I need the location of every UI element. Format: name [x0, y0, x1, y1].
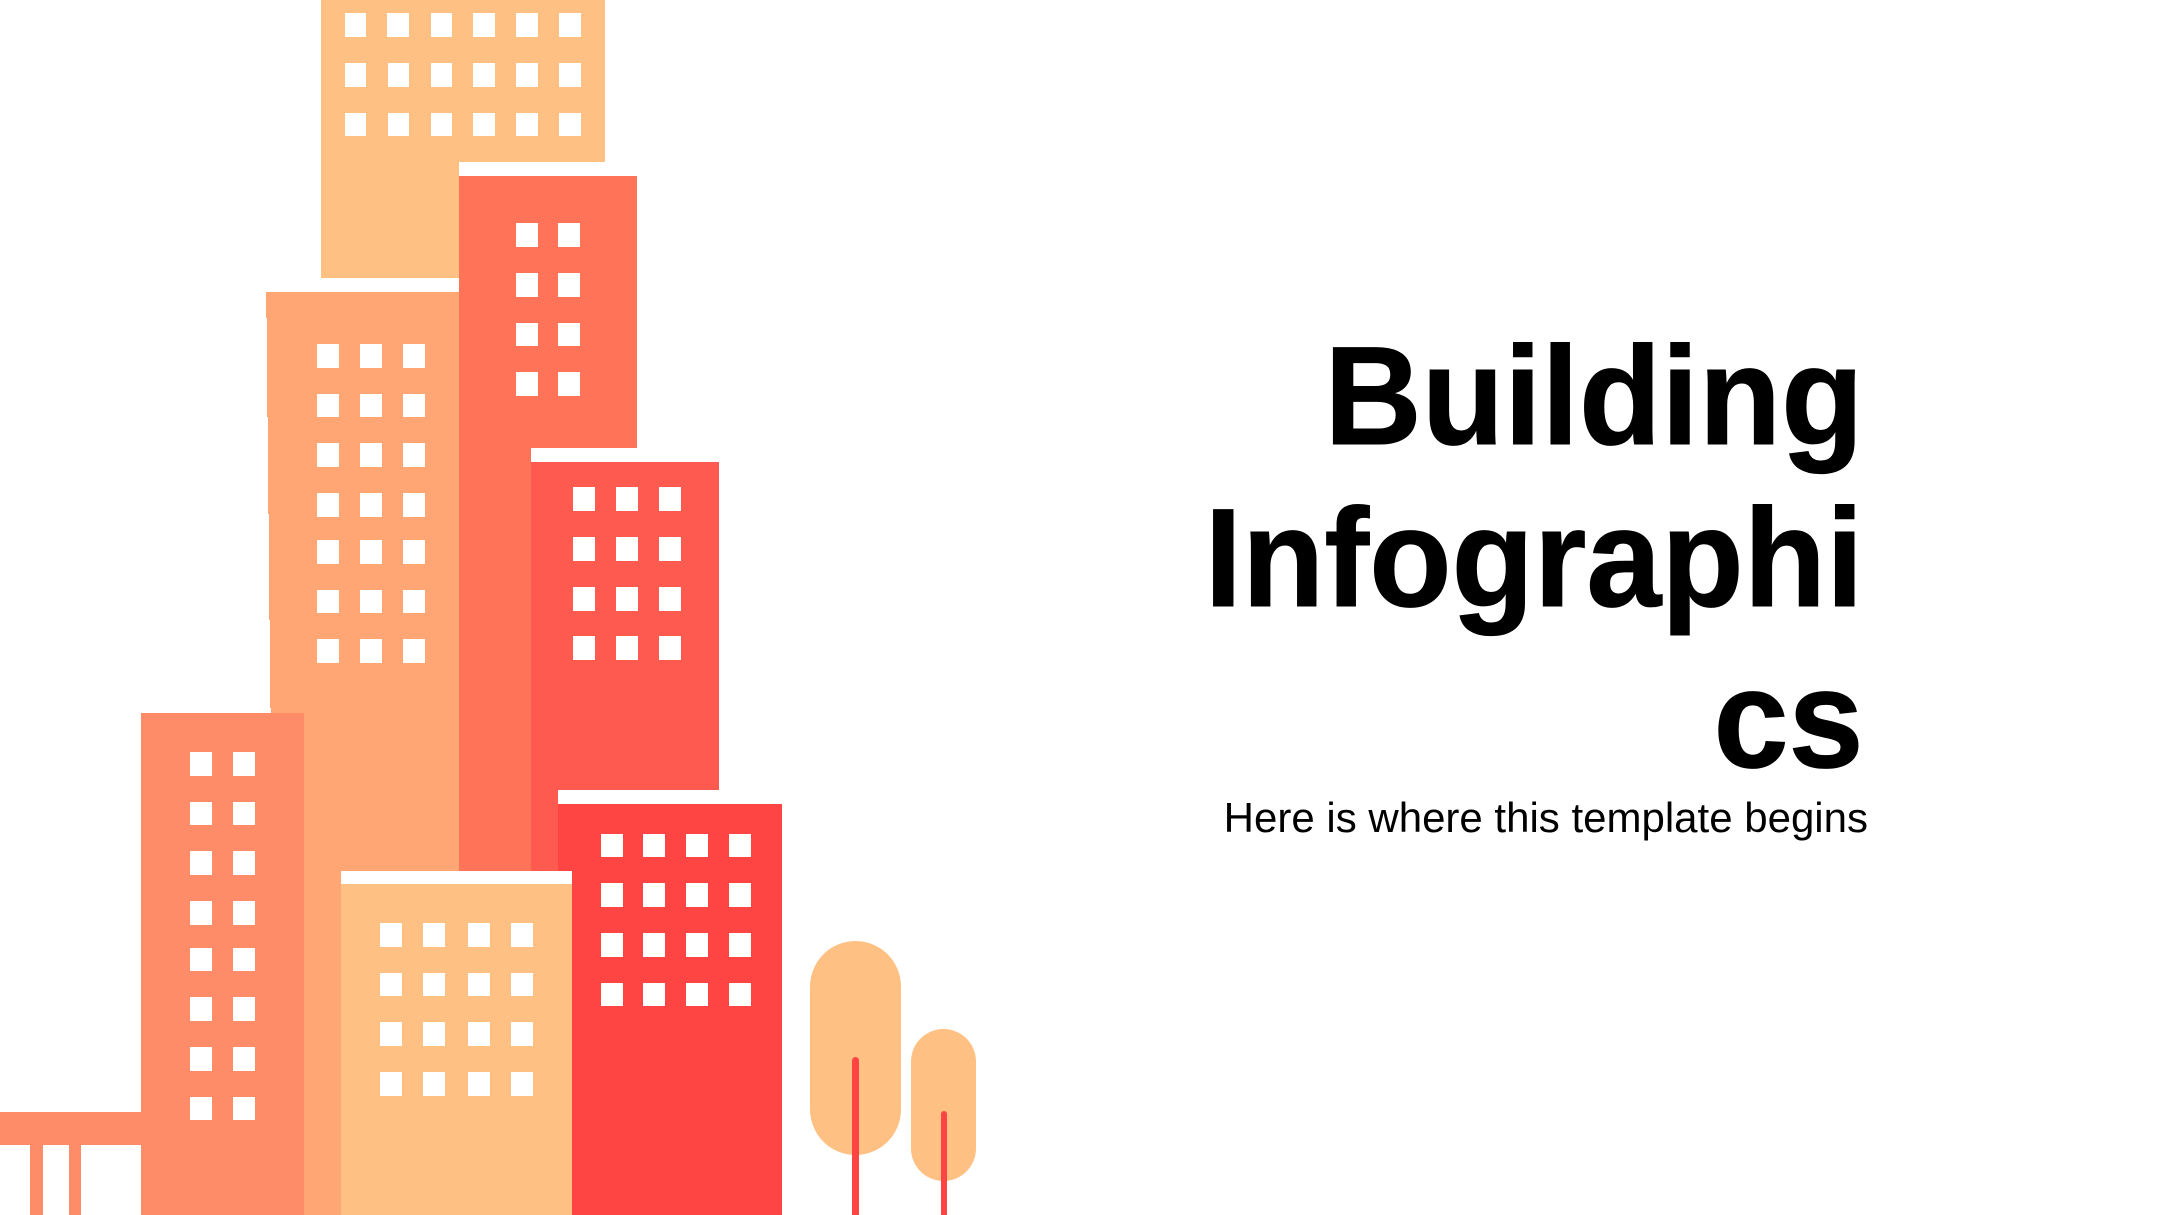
- building: coral tower: [459, 176, 637, 900]
- building: top tower: [321, 0, 605, 278]
- title: [1205, 319, 1864, 798]
- subtitle: Here is where this template begins: [1224, 794, 1868, 841]
- title: Building: [1324, 319, 1864, 475]
- building: salmon tower with walkway: [0, 713, 304, 1215]
- title: Infographi: [1205, 481, 1864, 637]
- tree: small: [911, 1029, 976, 1215]
- walkway: [0, 1112, 141, 1215]
- building: red tower: [531, 462, 719, 900]
- building: front orange block: [341, 871, 572, 1215]
- tree: large: [810, 941, 901, 1215]
- title: cs: [1714, 642, 1864, 798]
- building: bright red block: [558, 804, 782, 1215]
- illustration: city skyline: [0, 0, 976, 1215]
- building: light orange tower: [266, 292, 460, 1215]
